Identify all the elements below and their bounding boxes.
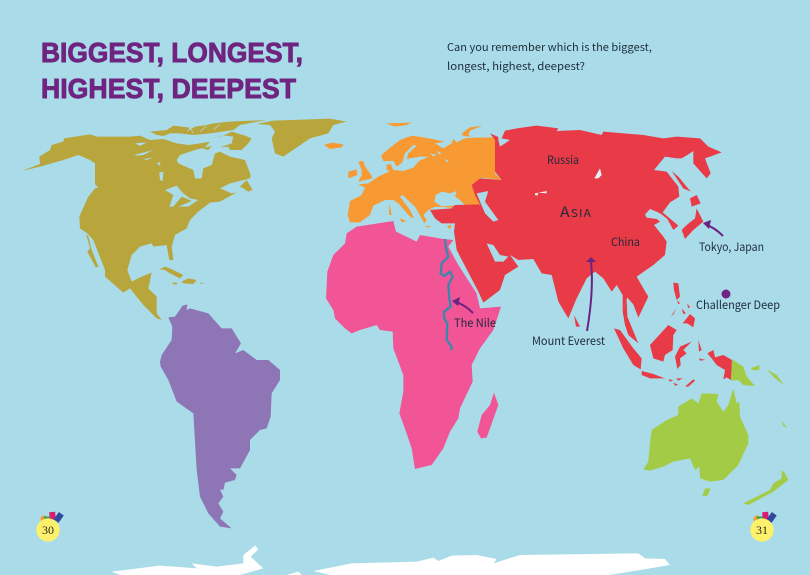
page number 31: 31 [756, 523, 768, 537]
world map [22, 119, 788, 575]
islands: Southeast Asia [614, 283, 732, 387]
intro text: longest, highest, deepest? [447, 59, 585, 74]
seas [477, 135, 510, 262]
arrow: The Nile [452, 297, 473, 313]
seas [430, 151, 465, 209]
arrow: Mount Everest [586, 257, 596, 331]
continent: North America [22, 119, 347, 320]
islands: Britain and Mediterranean [348, 161, 452, 229]
land: Baja California [86, 233, 98, 268]
islands: Canadian Arctic [150, 120, 267, 136]
land: Australia [643, 388, 748, 482]
title [41, 37, 303, 104]
island: Baffin [212, 132, 252, 150]
continent: Europe [348, 136, 502, 229]
land: New Zealand [743, 470, 788, 505]
continent: Oceania [643, 359, 788, 505]
island: Sri Lanka [574, 315, 580, 327]
continent: Africa [326, 221, 501, 469]
label: China: China [611, 234, 640, 250]
continent: Asia [430, 126, 722, 327]
land: Greenland [257, 119, 347, 157]
island: Madagascar [477, 393, 498, 438]
marker: Challenger Deep [722, 290, 730, 298]
islands: Caribbean [159, 267, 204, 284]
continent: South America [160, 304, 280, 528]
lakes [90, 142, 198, 207]
page number 30: 30 [42, 523, 54, 537]
label: Tokyo, Japan: Tokyo, Japan [699, 239, 764, 255]
river: the Nile [441, 239, 453, 350]
label: Asia: ASIA [560, 202, 592, 222]
label: Russia: Russia [547, 152, 579, 168]
label: Challenger Deep: Challenger Deep [696, 297, 780, 313]
continent: Antarctica [112, 546, 670, 575]
intro text [447, 40, 652, 74]
island: Japan [672, 171, 703, 239]
island: Newfoundland [240, 180, 253, 192]
title: BIGGEST, LONGEST, [41, 37, 303, 68]
title: HIGHEST, DEEPEST [41, 73, 296, 104]
label: The Nile: The Nile [454, 315, 496, 331]
label: Mount Everest: Mount Everest [532, 333, 606, 349]
arrow: Tokyo [703, 220, 723, 236]
lakes [535, 168, 602, 196]
islands: Iceland, Svalbard, Novaya Zemlya [324, 123, 483, 149]
page number 31 [750, 512, 777, 542]
page number 30 [36, 512, 64, 542]
intro text: Can you remember which is the biggest, [447, 40, 652, 55]
